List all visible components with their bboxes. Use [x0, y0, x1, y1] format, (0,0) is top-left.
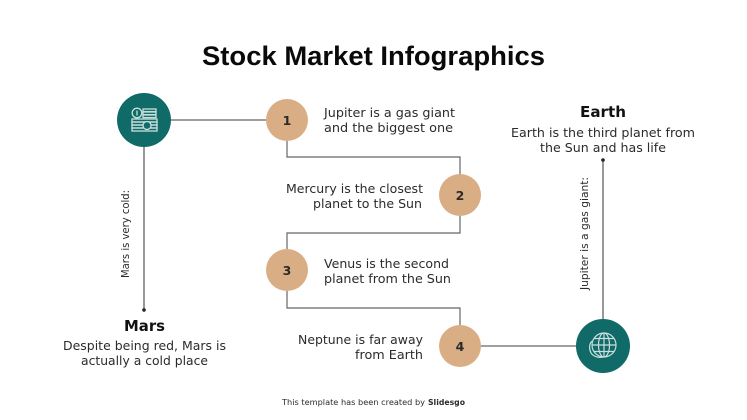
- step 2 text: Mercury is the closest: [286, 181, 423, 196]
- Earth description: the Sun and has life: [540, 140, 666, 155]
- step 1 text: and the biggest one: [324, 120, 453, 135]
- step 2 text: planet to the Sun: [313, 196, 422, 211]
- vertical label: Mars is very cold: Mars is very cold:: [120, 190, 132, 278]
- step 3 badge: [266, 249, 308, 291]
- Earth heading: Earth: [580, 103, 626, 121]
- step 4 badge: [439, 325, 481, 367]
- step 3 text: planet from the Sun: [324, 271, 451, 286]
- step 3 text: [324, 256, 451, 286]
- Mars heading: Mars: [124, 317, 165, 335]
- arrow: coins icon down to Mars: [142, 147, 146, 312]
- Mars description: actually a cold place: [81, 353, 208, 368]
- connector: step 4 to right icon: [481, 345, 576, 347]
- step 1 badge: [266, 99, 308, 141]
- connector: step 3 to step 4: [287, 291, 460, 325]
- title: Stock Market Infographics: [202, 41, 545, 71]
- step 1 text: Jupiter is a gas giant: [323, 105, 455, 120]
- Mars description: Despite being red, Mars is: [63, 338, 226, 353]
- step 4 badge: 4: [456, 339, 465, 354]
- step 2 badge: [439, 174, 481, 216]
- step 4 text: [298, 332, 424, 362]
- footer credit: This template has been created by: [281, 398, 425, 407]
- arrow: globe icon up to Earth: [601, 158, 605, 319]
- Earth description: [511, 125, 695, 155]
- connector: step 1 to step 2: [287, 141, 460, 174]
- Mars description: [63, 338, 226, 368]
- step 3 badge: 3: [283, 263, 291, 278]
- vertical label: Jupiter is a gas giant: Jupiter is a gas giant:: [579, 177, 591, 291]
- step 4 text: from Earth: [355, 347, 423, 362]
- step 1 badge: 1: [283, 113, 291, 128]
- step 4 text: Neptune is far away: [298, 332, 424, 347]
- step 3 text: Venus is the second: [324, 256, 449, 271]
- connector: step 2 to step 3: [287, 216, 460, 249]
- step 2 badge: 2: [456, 188, 464, 203]
- connector: left icon to step 1: [171, 119, 266, 121]
- icon: coins and banknotes: [117, 93, 171, 147]
- step 2 text: [286, 181, 423, 211]
- footer credit: Slidesgo: [428, 398, 465, 407]
- icon: globe: [576, 319, 630, 373]
- step 1 text: [323, 105, 455, 135]
- Earth description: Earth is the third planet from: [511, 125, 695, 140]
